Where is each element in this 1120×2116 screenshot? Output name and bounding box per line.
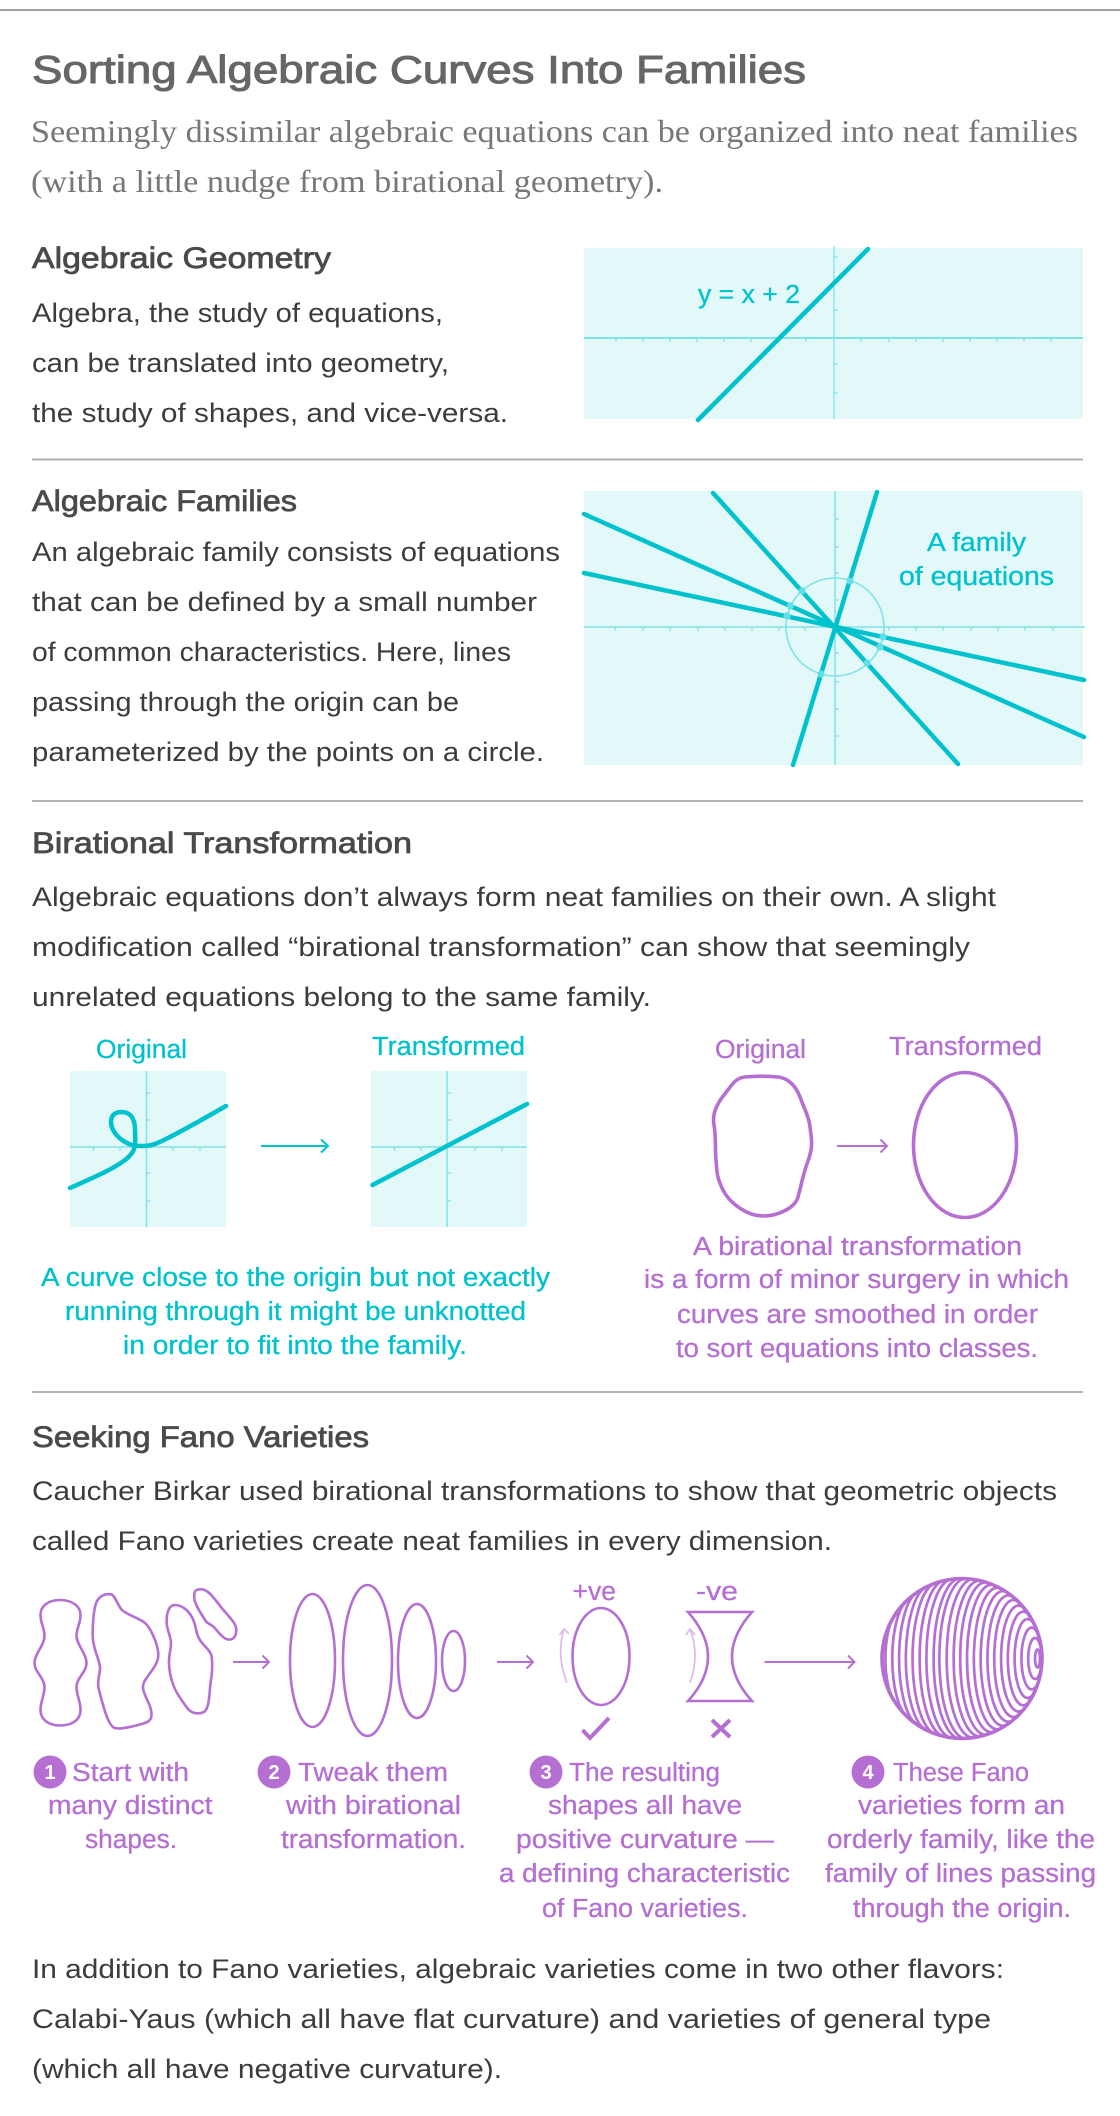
text block: algebraic families: An algebraic family consists of equations	[32, 537, 560, 567]
text block: seeking fano varieties	[32, 1476, 1057, 1556]
text block: algebraic families: of common characteristics. Here, lines	[32, 637, 511, 667]
text block: algebraic geometry: Algebra, the study of equations,	[32, 298, 443, 328]
text block: algebraic families: that can be defined by a small number	[32, 587, 537, 617]
negative curvature example	[686, 1578, 752, 1737]
step 2 caption: with birational	[285, 1792, 461, 1820]
chart: knotted original curve	[70, 1071, 226, 1227]
text block: birational transformation	[32, 882, 997, 1012]
caption: teal curve explanation	[41, 1264, 550, 1360]
step 1 caption: shapes.	[85, 1826, 177, 1854]
caption: purple surgery explanation: curves are smoothed in order	[677, 1301, 1039, 1329]
subtitle	[31, 113, 1078, 199]
step 4 caption: through the origin.	[853, 1895, 1071, 1923]
step 2 shapes: ellipses	[290, 1585, 465, 1736]
label: transformed (teal): Transformed	[372, 1033, 525, 1061]
title: Sorting Algebraic Curves Into Families	[32, 49, 806, 92]
caption: purple surgery explanation: to sort equations into classes.	[676, 1335, 1038, 1363]
negative curvature example: -ve	[696, 1578, 738, 1606]
text block: birational transformation: unrelated equations belong to the same family.	[32, 982, 651, 1012]
chart: line y = x + 2: y = x + 2	[698, 281, 800, 309]
step 1 shapes: distinct blobs	[34, 1589, 236, 1729]
closing text block	[32, 1954, 1004, 2084]
label: transformed (purple): Transformed	[889, 1033, 1042, 1061]
step 4 caption: These Fano	[893, 1759, 1029, 1787]
step 3 caption: The resulting	[569, 1759, 720, 1787]
arrow: step 1 to step 2	[233, 1656, 269, 1668]
closing text block: In addition to Fano varieties, algebraic varieties come in two other flavors:	[32, 1954, 1004, 1984]
subtitle: Seemingly dissimilar algebraic equations can be organized into neat families	[31, 113, 1078, 149]
arrow: step 2 to step 3	[497, 1656, 533, 1668]
closing text block: (which all have negative curvature).	[32, 2054, 502, 2084]
step 4 caption: orderly family, like the	[827, 1826, 1095, 1854]
text block: algebraic families	[32, 537, 560, 767]
step 2 caption: Tweak them	[298, 1759, 448, 1787]
heading: Birational Transformation: Birational Transformation	[32, 827, 412, 860]
text block: seeking fano varieties: Caucher Birkar used birational transformations to show that geometric objects	[32, 1476, 1057, 1506]
text block: algebraic families: passing through the origin can be	[32, 687, 459, 717]
step 3 caption: of Fano varieties.	[542, 1895, 748, 1923]
step 4 caption: family of lines passing	[825, 1860, 1096, 1888]
chart: family of lines through origin: A family	[927, 529, 1026, 557]
step 3 caption: positive curvature —	[516, 1826, 775, 1854]
step 3 caption	[499, 1756, 790, 1923]
label: original (purple): Original	[715, 1036, 806, 1064]
caption: teal curve explanation: in order to fit into the family.	[123, 1332, 467, 1360]
step 2 caption: transformation.	[281, 1826, 466, 1854]
step 1 caption: 1	[44, 1762, 56, 1784]
arrow: step 3 to step 4	[764, 1656, 854, 1668]
step 4 caption: varieties form an	[858, 1792, 1065, 1820]
chart: family of lines through origin	[584, 491, 1085, 765]
caption: teal curve explanation: running through it might be unknotted	[65, 1298, 526, 1326]
label: original (teal): Original	[96, 1036, 187, 1064]
heading: Seeking Fano Varieties: Seeking Fano Varieties	[32, 1421, 369, 1454]
caption: purple surgery explanation: A birational transformation	[693, 1233, 1022, 1261]
text block: birational transformation: modification called “birational transformation” can show that seemingly	[32, 932, 971, 962]
caption: teal curve explanation: A curve close to the origin but not exactly	[41, 1264, 550, 1292]
step 2 caption: 2	[268, 1762, 280, 1784]
subtitle: (with a little nudge from birational geometry).	[31, 163, 663, 199]
step 1 caption	[34, 1756, 212, 1854]
arrow: teal original to transformed	[261, 1140, 328, 1152]
arrow: purple original to transformed	[837, 1140, 887, 1152]
sphere: Fano family of nested curves	[882, 1578, 1042, 1738]
step 3 caption: shapes all have	[548, 1792, 742, 1820]
caption: purple surgery explanation	[644, 1233, 1069, 1363]
step 2 caption	[258, 1756, 466, 1854]
step 1 caption: many distinct	[48, 1792, 212, 1820]
closing text block: Calabi-Yaus (which all have flat curvature) and varieties of general type	[32, 2004, 991, 2034]
positive curvature example	[560, 1578, 630, 1738]
step 1 caption: Start with	[72, 1759, 189, 1787]
text block: algebraic geometry	[32, 298, 508, 428]
step 4 caption	[825, 1756, 1096, 1923]
text block: seeking fano varieties: called Fano varieties create neat families in every dimension.	[32, 1526, 832, 1556]
heading: Algebraic Geometry: Algebraic Geometry	[32, 242, 331, 275]
chart: line y = x + 2	[584, 246, 1083, 420]
text block: algebraic geometry: can be translated into geometry,	[32, 348, 449, 378]
step 4 caption: 4	[862, 1762, 874, 1784]
shape: smooth transformed ellipse	[914, 1072, 1016, 1218]
step 3 caption: a defining characteristic	[499, 1860, 790, 1888]
text block: algebraic geometry: the study of shapes, and vice-versa.	[32, 398, 508, 428]
chart: transformed straight line	[371, 1071, 527, 1227]
chart: family of lines through origin: of equations	[899, 563, 1054, 591]
caption: purple surgery explanation: is a form of minor surgery in which	[644, 1266, 1069, 1294]
step 3 caption: 3	[540, 1762, 552, 1784]
text block: birational transformation: Algebraic equations don’t always form neat families on their own. A slight	[32, 882, 997, 912]
shape: lumpy original curve	[713, 1076, 812, 1216]
heading: Algebraic Families: Algebraic Families	[32, 485, 297, 518]
text block: algebraic families: parameterized by the points on a circle.	[32, 737, 544, 767]
positive curvature example: +ve	[572, 1578, 616, 1606]
